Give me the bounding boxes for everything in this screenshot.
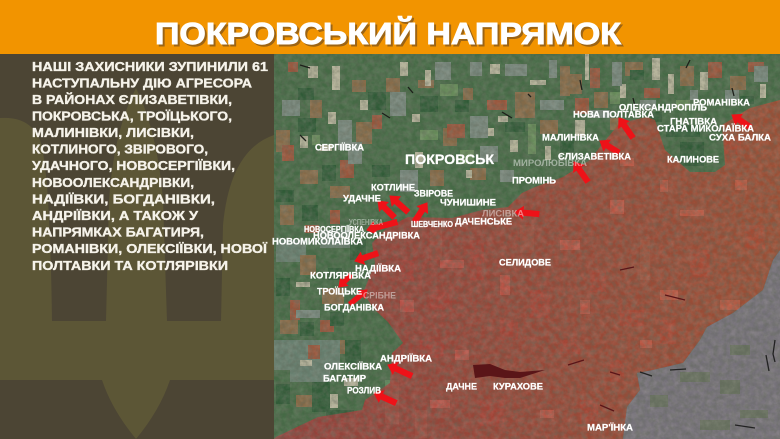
text block: summary of repelled attacks: КОТЛИНОГО, ЗВІРОВОГО, [32,142,208,156]
text block: summary of repelled attacks: НАДІЇВКИ, БОГДАНІВКИ, [32,192,215,206]
arrows: directions of enemy attacks [335,110,754,408]
map labels: settlements: СЕРГІЇВКА [315,142,364,154]
map labels: settlements: ТРОЇЦЬКЕ [317,286,362,298]
title: ПОКРОВСЬКИЙ НАПРЯМОК [155,15,621,51]
map: Donetsk urban area in grey [623,250,780,439]
map labels: settlements: БАГАТИР [323,374,367,384]
map labels: settlements: РОЗЛИВ [347,386,381,396]
map labels: settlements: КОТЛИНЕ [371,182,415,194]
map labels: faded settlements: МИРОЛЮБІВКА [513,158,587,169]
map labels: settlements [272,98,771,434]
map labels: settlements: УДАЧНЕ [343,194,381,204]
text block: summary of repelled attacks: ПОЛТАВКИ ТА КОТЛЯРІВКИ [32,258,228,273]
map: occupied territory in red [274,100,780,439]
map labels: settlements: ЄЛИЗАВЕТІВКА [558,152,631,162]
map labels: settlements: ДАЧНЕ [446,382,477,392]
text block: summary of repelled attacks: МАЛИНІВКИ, ЛИСІВКИ, [32,125,194,140]
map labels: settlements: КАЛИНОВЕ [667,154,719,166]
map labels: faded settlements: СРІБНЕ [363,290,396,302]
map labels: settlements: НОВООЛЕКСАНДРІВКА [313,230,420,242]
satellite map [274,54,780,439]
map labels: settlements: МАР'ЇНКА [587,422,633,434]
text block: summary of repelled attacks: АНДРІЇВКИ, А ТАКОЖ У [32,208,199,223]
text block: summary of repelled attacks: НАПРЯМКАХ БАГАТИРЯ, [32,225,204,240]
map labels: settlements: ОЛЕКСАНДРОПІЛЬ [619,102,707,114]
left panel background [0,54,274,439]
map labels: faded settlements: УСПЕНІВКА [349,217,383,227]
map labels: settlements: РОМАНІВКА [693,98,750,108]
map labels: settlements: НОВА ПОЛТАВКА [573,110,654,120]
map labels: settlements: ПРОМІНЬ [512,176,556,186]
text block: summary of repelled attacks: УДАЧНОГО, НОВОСЕРГІЇВКИ, [32,158,235,173]
map labels: settlements: КОТЛЯРІВКА [310,270,371,282]
map labels: settlements: ЧУНИШИНЕ [440,198,496,208]
map labels: settlements: МАЛИНІВКА [542,132,599,144]
map labels: settlements: АНДРІЇВКА [380,354,432,364]
map labels: settlements: КУРАХОВЕ [493,382,543,392]
title: ПОКРОВСЬКИЙ НАПРЯМОК [157,17,623,53]
map labels: settlements: НОВОСЕРГІЇВКА [304,225,364,234]
text block: summary of repelled attacks: НАСТУПАЛЬНУ ДІЮ АГРЕСОРА [32,75,253,90]
map labels: settlements: СЕЛИДОВЕ [499,258,551,268]
map labels: settlements: ПОКРОВСЬК [405,151,494,167]
map: field patches [274,54,768,438]
text block: summary of repelled attacks: РОМАНІВКИ, ОЛЕКСІЇВКИ, НОВОЇ [32,241,267,256]
map labels: faded settlements [349,158,587,302]
map labels: settlements: ДАЧЕНСЬКЕ [455,216,512,228]
map labels: settlements: СТАРА МИКОЛАЇВКА [657,124,754,134]
map labels: faded settlements: ЛИСІВКА [482,208,524,220]
header banner [0,0,780,54]
text block: summary of repelled attacks: ПОКРОВСЬКА, ТРОЇЦЬКОГО, [32,108,232,124]
text block: summary of repelled attacks [32,59,268,273]
map labels: settlements: НОВОМИКОЛАЇВКА [272,236,363,248]
map labels: settlements: ЗВІРОВЕ [414,188,453,200]
map labels: settlements: ШЕВЧЕНКО [411,220,453,229]
map labels: settlements: СУХА БАЛКА [709,132,771,144]
text block: summary of repelled attacks: НАШІ ЗАХИСНИКИ ЗУПИНИЛИ 61 [32,59,268,74]
map labels: settlements: ОЛЕКСІЇВКА [324,362,382,372]
map labels: settlements: БОГДАНІВКА [324,302,384,314]
map: Kurakhove reservoir [473,364,545,378]
text block: summary of repelled attacks: В РАЙОНАХ ЄЛИЗАВЕТІВКИ, [32,92,232,107]
map labels: settlements: ГНАТІВКА [670,116,717,128]
map: ravines and water bodies [300,60,775,428]
map: texture noise [274,54,780,439]
icon: trident watermark [0,88,274,439]
text block: summary of repelled attacks: НОВООЛЕКСАНДРІВКИ, [32,175,194,190]
map labels: settlements: НАДІЇВКА [355,264,401,274]
